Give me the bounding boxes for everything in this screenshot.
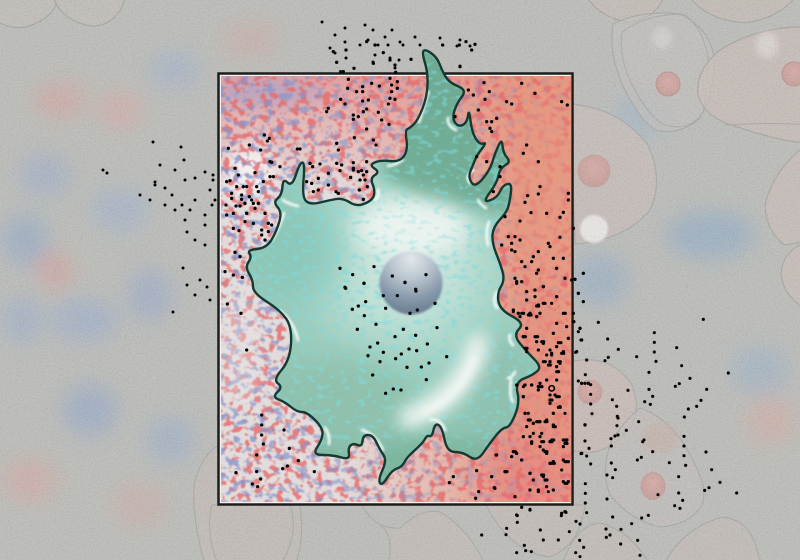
white rim highlights [272, 92, 515, 450]
particles: dots left of the frame [103, 142, 215, 312]
cell texture: cyan flecks, shading and crescent [250, 52, 536, 479]
background cell: top left pair [0, 0, 126, 28]
frame border [218, 74, 572, 504]
background cell: top centre right pair [585, 0, 797, 23]
background cells: bottom edge [194, 445, 760, 560]
background cell with pale nucleus, upper right [612, 13, 714, 131]
central cell body with spike-like projections [240, 50, 550, 490]
particles: dots right and below the frame [482, 303, 737, 557]
background cell: large right cell [698, 27, 800, 143]
tissue base and stained blobs [210, 76, 580, 515]
background cell: right of frame with nucleus [570, 360, 636, 452]
background cells: far right edge [765, 143, 800, 310]
particles: dots in nucleus [340, 267, 426, 289]
particles: dots above the frame [322, 22, 470, 68]
particles: dots in cell and lower panel [227, 282, 588, 515]
dark cell outline [247, 50, 539, 484]
background cell: lower right large with nucleus [605, 408, 704, 527]
background cell: behind frame, with pink nucleus and white spot [570, 104, 657, 244]
particles: scattered black dots, top and upper panel [225, 42, 583, 287]
framed tissue panel [210, 74, 580, 515]
nucleus sphere [380, 252, 442, 314]
